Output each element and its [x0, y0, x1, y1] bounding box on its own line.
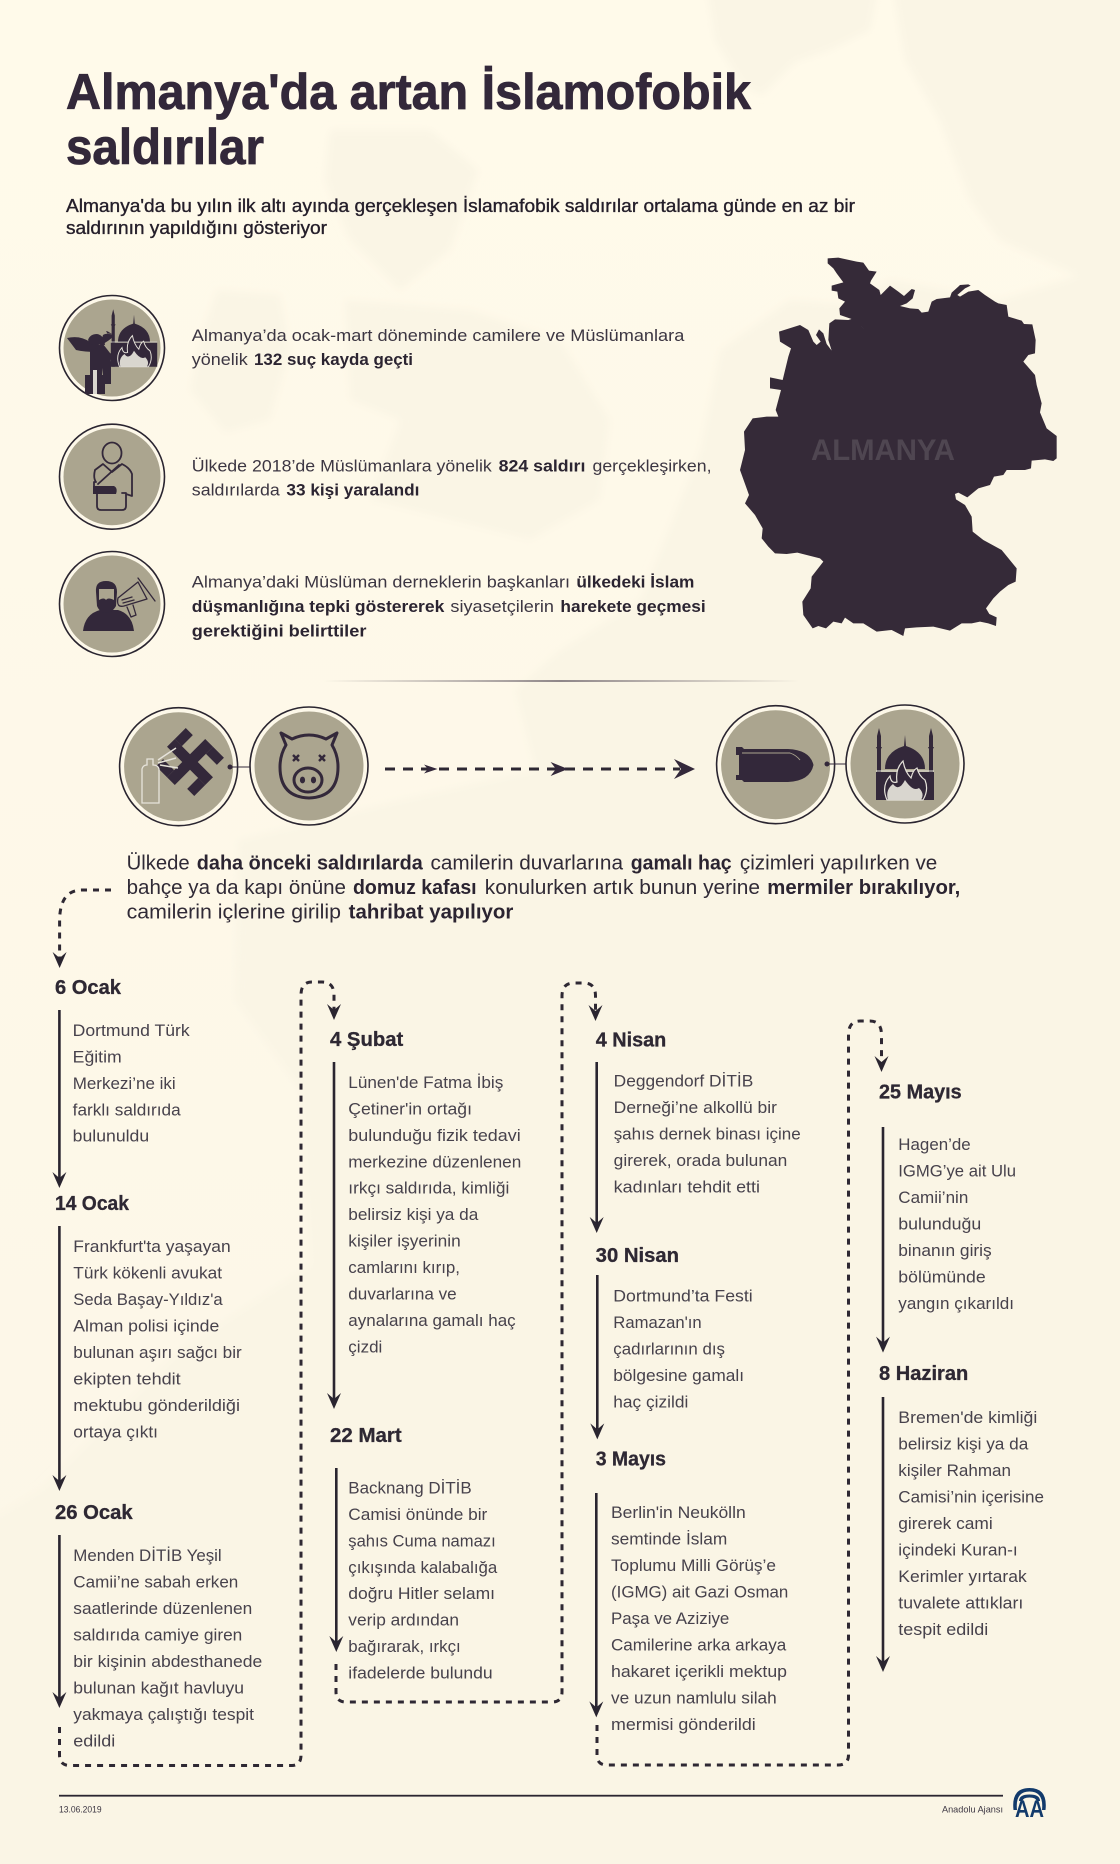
description: çizdi: [348, 1337, 382, 1356]
point 3 text: düşmanlığına tepki göstererek: [192, 597, 445, 616]
icon: swastika graffiti and spray can: [120, 708, 238, 826]
description: [348, 1478, 498, 1682]
dashed connector: column 1 to column 2: [60, 982, 341, 1766]
description: [348, 1073, 521, 1356]
date heading: 26 Ocak: [55, 1502, 134, 1524]
description: bölgesine gamalı: [613, 1366, 744, 1385]
timeline arrow: [590, 1062, 604, 1233]
description: belirsiz kişi ya da: [898, 1434, 1029, 1453]
description: Dortmund’ta Festi: [613, 1287, 753, 1306]
description: haç çizildi: [613, 1393, 688, 1412]
description: ekipten tehdit: [73, 1370, 181, 1388]
footer date: 13.06.2019: [59, 1805, 102, 1816]
point 1 text: Almanya’da ocak-mart döneminde camilere ve Müslümanlara: [192, 326, 685, 345]
point 3 text: ülkedeki İslam: [576, 573, 694, 592]
point 2 text: saldırılarda: [192, 480, 280, 499]
icon: Anadolu Agency logo: AA: [1015, 1796, 1044, 1823]
description: saldırıda camiye giren: [73, 1626, 242, 1644]
date heading: 30 Nisan: [596, 1245, 679, 1267]
timeline arrow: [876, 1127, 890, 1353]
intro text: domuz kafası: [353, 877, 477, 899]
timeline arrow: [589, 1493, 603, 1717]
dashed connector: column 3 to column 4: [597, 1021, 888, 1765]
description: Lünen'de Fatma İbiş: [348, 1073, 503, 1092]
description: Bremen'de kimliği: [898, 1408, 1037, 1427]
description: (IGMG) ait Gazi Osman: [611, 1582, 788, 1602]
description: aynalarına gamalı haç: [348, 1311, 516, 1330]
description: Merkezi’ne iki: [73, 1074, 176, 1093]
subtitle: [66, 196, 855, 238]
description: Çetiner'in ortağı: [348, 1099, 472, 1118]
description: [614, 1071, 801, 1196]
description: kişiler işyerinin: [348, 1232, 461, 1251]
subtitle: saldırının yapıldığını gösteriyor: [66, 218, 327, 238]
description: Camii’nin: [898, 1188, 968, 1207]
point 1 text: 132 suç kayda geçti: [254, 350, 413, 369]
timeline arrow: [329, 1468, 343, 1652]
description: ifadelerde bulundu: [348, 1664, 493, 1682]
intro text: konulurken artık bunun yerine: [485, 877, 760, 899]
description: içindeki Kuran-ı: [898, 1540, 1018, 1559]
point 3 text: harekete geçmesi: [560, 597, 706, 616]
description: ve uzun namlulu silah: [611, 1688, 777, 1708]
description: girerek cami: [898, 1514, 993, 1533]
map label: ALMANYA: [811, 434, 955, 467]
connector between left icons: [228, 764, 260, 770]
icon: burning mosque: [846, 705, 964, 823]
description: Camisi önünde bir: [348, 1505, 488, 1524]
description: ırkçı saldırıda, kimliği: [348, 1179, 509, 1198]
description: Deggendorf DİTİB: [614, 1071, 753, 1090]
description: girerek, orada bulunan: [614, 1151, 787, 1170]
intro text: camilerin içlerine girilip: [127, 901, 341, 923]
description: Menden DİTİB Yeşil: [73, 1546, 222, 1565]
description: yakmaya çalıştığı tespit: [73, 1705, 254, 1724]
intro text: bahçe ya da kapı önüne: [127, 877, 346, 899]
description: [611, 1503, 788, 1734]
point 2 text: gerçekleşirken,: [592, 457, 712, 476]
description: duvarlarına ve: [348, 1284, 457, 1303]
description: belirsiz kişi ya da: [348, 1205, 479, 1224]
description: Dortmund Türk: [73, 1021, 190, 1040]
description: mektubu gönderildiği: [73, 1396, 240, 1415]
description: yangın çıkarıldı: [898, 1294, 1014, 1313]
description: Backnang DİTİB: [348, 1478, 472, 1498]
date heading: 6 Ocak: [55, 977, 122, 999]
description: [73, 1021, 190, 1146]
date heading: 22 Mart: [330, 1425, 402, 1447]
timeline entry: 22 Mart: [329, 1425, 498, 1682]
connector between right icons: [824, 762, 856, 766]
description: tuvalete attıkları: [898, 1593, 1023, 1612]
date heading: 14 Ocak: [55, 1193, 130, 1215]
date heading: 3 Mayıs: [596, 1448, 666, 1470]
description: [73, 1546, 262, 1750]
description: [73, 1237, 242, 1442]
icon: attacker and burning mosque: [60, 296, 164, 400]
icon: speaker with megaphone: [60, 552, 164, 656]
point 3 text: Almanya’daki Müslüman derneklerin başkanları: [192, 573, 570, 592]
point 3 text: siyasetçilerin: [450, 597, 554, 616]
point 2 text: Ülkede 2018’de Müslümanlara yönelik: [192, 457, 492, 476]
description: verip ardından: [348, 1611, 459, 1630]
description: Ramazan'ın: [613, 1313, 702, 1332]
description: Hagen’de: [898, 1135, 971, 1154]
description: Berlin'in Neukölln: [611, 1503, 746, 1522]
description: semtinde İslam: [611, 1530, 727, 1548]
point 3 text: [192, 573, 706, 641]
subtitle: Almanya'da bu yılın ilk altı ayında gerçekleşen İslamafobik saldırılar ortalama günde en az bir: [66, 196, 855, 216]
description: Camii’ne sabah erken: [73, 1572, 238, 1592]
intro text: gamalı haç: [631, 852, 732, 874]
description: kadınları tehdit etti: [614, 1177, 760, 1196]
date heading: 25 Mayıs: [879, 1082, 962, 1104]
description: tespit edildi: [898, 1620, 988, 1639]
timeline entry: 4 Şubat: [327, 1029, 521, 1409]
description: saatlerinde düzenlenen: [73, 1599, 252, 1618]
timeline arrow: [876, 1397, 890, 1672]
icon: pig head: [250, 707, 368, 825]
map of Germany: [740, 258, 1057, 636]
date heading: 4 Nisan: [596, 1030, 666, 1052]
timeline entry: 26 Ocak: [52, 1502, 262, 1750]
title: Almanya'da artan İslamofobik: [66, 64, 751, 120]
intro text: çizimleri yapılırken ve: [740, 852, 937, 874]
point 3 text: gerektiğini belirttiler: [192, 622, 367, 641]
dashed connector: column 2 to column 3: [336, 983, 602, 1702]
point 2 text: [192, 457, 712, 499]
dashed arrow from intro to timeline: [53, 890, 111, 968]
description: Seda Başay-Yıldız'a: [73, 1290, 223, 1309]
point 1 text: [192, 326, 685, 369]
timeline entry: 30 Nisan: [590, 1245, 753, 1439]
description: bulunduğu: [898, 1215, 981, 1234]
description: merkezine düzenlenen: [348, 1152, 521, 1171]
description: bulunan aşırı sağcı bir: [73, 1343, 242, 1362]
description: [898, 1408, 1044, 1639]
description: IGMG’ye ait Ulu: [898, 1162, 1016, 1181]
timeline arrow: [52, 1226, 66, 1491]
timeline entry: 6 Ocak: [52, 977, 190, 1188]
timeline entry: 4 Nisan: [590, 1030, 801, 1233]
description: farklı saldırıda: [73, 1100, 181, 1120]
intro text: mermiler bırakılıyor,: [767, 877, 960, 899]
intro text: daha önceki saldırılarda: [197, 852, 424, 874]
description: şahıs Cuma namazı: [348, 1531, 496, 1550]
timeline arrow: [327, 1062, 341, 1409]
description: bağırarak, ırkçı: [348, 1637, 461, 1656]
point 2 text: 33 kişi yaralandı: [286, 480, 419, 499]
description: mermisi gönderildi: [611, 1715, 756, 1734]
description: Eğitim: [73, 1048, 122, 1066]
title: [66, 64, 751, 175]
description: hakaret içerikli mektup: [611, 1662, 787, 1681]
icon: bullet: [717, 706, 835, 824]
description: Derneği’ne alkollü bir: [614, 1098, 777, 1117]
description: bulunduğu fizik tedavi: [348, 1126, 521, 1145]
date heading: 4 Şubat: [330, 1029, 404, 1051]
timeline arrow: [52, 1535, 66, 1708]
icon: injured person: [60, 424, 164, 529]
intro text: tahribat yapılıyor: [349, 901, 514, 923]
description: Paşa ve Aziziye: [611, 1609, 729, 1628]
description: çadırlarının dış: [613, 1340, 725, 1359]
description: [613, 1287, 753, 1412]
description: kişiler Rahman: [898, 1461, 1011, 1480]
description: çıkışında kalabalığa: [348, 1558, 498, 1577]
intro text: [127, 852, 960, 923]
timeline entry: 25 Mayıs: [876, 1082, 1016, 1353]
footer credit: Anadolu Ajansı: [942, 1805, 1003, 1816]
intro text: camilerin duvarlarına: [430, 852, 624, 874]
description: [898, 1135, 1016, 1313]
description: Alman polisi içinde: [73, 1316, 219, 1336]
description: doğru Hitler selamı: [348, 1584, 495, 1603]
description: camlarını kırıp,: [348, 1258, 460, 1277]
description: Camisi’nin içerisine: [898, 1487, 1044, 1506]
point 2 text: 824 saldırı: [499, 457, 585, 476]
description: şahıs dernek binası içine: [614, 1124, 801, 1143]
timeline entry: 8 Haziran: [876, 1363, 1044, 1672]
timeline arrow: [52, 1010, 66, 1188]
date heading: 8 Haziran: [879, 1363, 968, 1385]
timeline entry: 14 Ocak: [52, 1193, 242, 1491]
arrow: change from old attacks to new attacks: [385, 759, 695, 779]
description: bir kişinin abdesthanede: [73, 1652, 262, 1671]
description: Toplumu Milli Görüş’e: [611, 1556, 776, 1575]
description: ortaya çıktı: [73, 1422, 158, 1442]
description: edildi: [73, 1732, 115, 1750]
description: Türk kökenli avukat: [73, 1264, 222, 1282]
description: binanın giriş: [898, 1241, 992, 1260]
description: Kerimler yırtarak: [898, 1567, 1027, 1586]
timeline arrow: [590, 1275, 604, 1439]
timeline entry: 3 Mayıs: [589, 1448, 788, 1734]
point 1 text: yönelik: [192, 350, 248, 369]
description: bulunan kağıt havluyu: [73, 1678, 244, 1698]
description: Camilerine arka arkaya: [611, 1636, 787, 1654]
description: bulunuldu: [73, 1126, 149, 1146]
title: saldırılar: [66, 119, 264, 175]
intro text: Ülkede: [127, 852, 190, 874]
description: bölümünde: [898, 1268, 986, 1287]
icon: Anadolu Agency logo: [1013, 1788, 1046, 1823]
description: Frankfurt'ta yaşayan: [73, 1237, 231, 1256]
